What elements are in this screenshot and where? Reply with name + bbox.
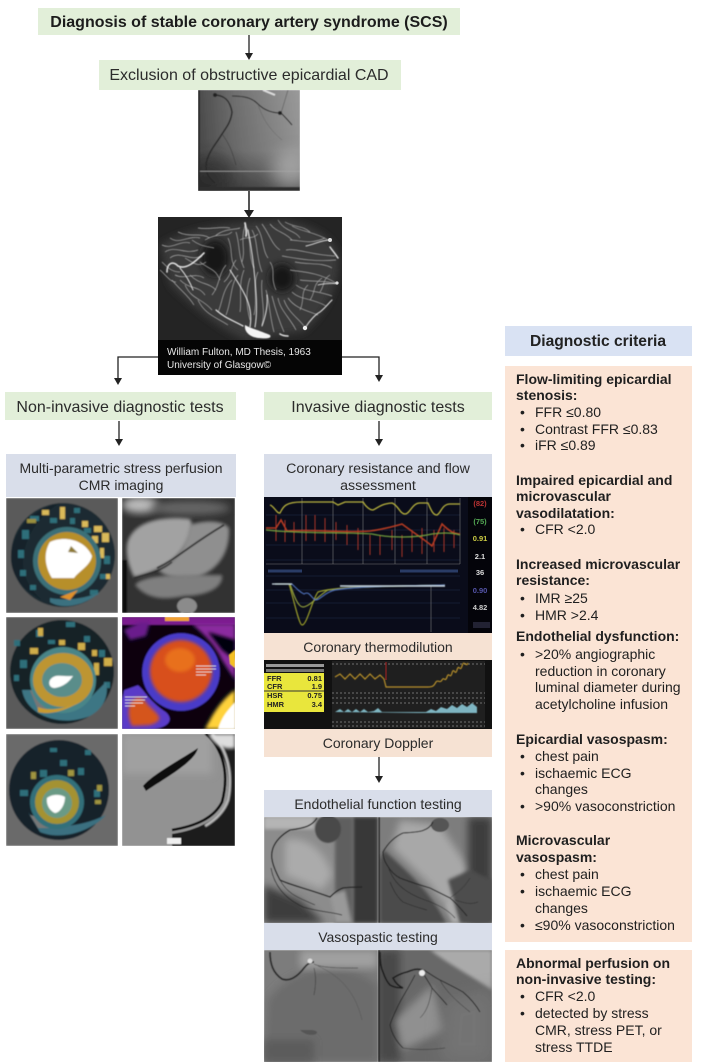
chart: FFR CFR HSR HMR readout with waveforms: 3.4 [312,700,323,709]
chart: FFR CFR HSR HMR readout with waveforms: FFR [267,674,282,683]
criterion: epicardial vasospasm: chest pain [535,748,599,764]
heading: diagnostic criteria [505,326,692,356]
readouts on right of chart: 0.91 [473,534,487,543]
criterion: microvascular vasospasm: vasospasm: [516,849,597,865]
criterion: microvascular vasospasm: • [520,866,525,882]
criterion: increased microvascular resistance: IMR ≥25 [535,590,588,606]
criterion: flow-limiting epicardial stenosis: Contrast FFR ≤0.83 [535,421,658,437]
criterion: microvascular vasospasm: chest pain [535,866,599,882]
band: coronary thermodilution: Coronary thermodilution [303,639,453,655]
heading: non-invasive diagnostic tests [5,392,236,420]
panel: abnormal perfusion on non-invasive testing: • [520,1005,525,1021]
criterion: flow-limiting epicardial stenosis: • [520,421,525,437]
caption bar: University of Glasgow© [167,360,272,371]
criterion: flow-limiting epicardial stenosis [516,371,672,453]
arrow: invasive to coronary resistance [375,421,383,446]
image: microvascular cast, William Fulton thesis [158,217,342,375]
image: stress perfusion PET colour map [122,617,235,729]
heading: coronary resistance [264,454,492,497]
heading: diagnostic criteria: Diagnostic criteria [530,333,666,350]
panel: vasospastic testing [264,923,492,1062]
image: perfusion map, middle [6,617,118,729]
panel: abnormal perfusion on non-invasive testing: detected by stress [535,1005,649,1021]
image: angiogram after nitrate [378,950,492,1062]
criterion: epicardial vasospasm [516,731,675,814]
heading: coronary resistance: assessment [340,478,416,494]
criterion: flow-limiting epicardial stenosis: Flow-limiting epicardial [516,371,672,387]
panel: abnormal perfusion on non-invasive testing [505,950,692,1062]
heading: vasospastic testing [264,923,492,950]
arrow: invasive flow tests to endothelial testing [375,757,383,783]
heading: endothelial function testing [264,790,492,817]
panel: endothelial function testing [264,790,492,923]
criterion: microvascular vasospasm: • [520,883,525,899]
criterion: increased microvascular resistance: Increased microvascular [516,556,681,572]
heading: invasive diagnostic tests [264,392,492,420]
chart: FFR CFR HSR HMR readout with waveforms: 0.81 [307,674,322,683]
criterion: endothelial dysfunction: luminal diameter during [535,679,681,695]
panel: abnormal perfusion on non-invasive testing: stress TTDE [535,1039,613,1055]
criterion: flow-limiting epicardial stenosis: FFR ≤0.80 [535,404,601,420]
heading: coronary resistance: Coronary resistance and flow [286,461,471,477]
criterion: impaired vasodilatation: Impaired epicardial and [516,472,672,488]
criterion: microvascular vasospasm: Microvascular [516,832,611,848]
criterion: epicardial vasospasm: ischaemic ECG [535,765,631,781]
title: diagnosis of SCS [38,8,460,35]
chart: FFR CFR HSR HMR readout with waveforms: 0.75 [307,691,322,700]
criterion: increased microvascular resistance [516,556,681,623]
image: late gadolinium enhancement CMR [122,734,235,846]
criterion: increased microvascular resistance: resistance: [516,572,590,588]
criterion: epicardial vasospasm: >90% vasoconstriction [535,798,675,814]
criterion: endothelial dysfunction: reduction in coronary [535,663,666,679]
criterion: endothelial dysfunction [516,628,681,712]
heading: CMR imaging: CMR imaging [79,477,163,493]
criterion: flow-limiting epicardial stenosis: • [520,437,525,453]
criterion: impaired vasodilatation: vasodilatation: [516,505,615,521]
readouts on right of chart: (75) [473,517,487,526]
criterion: impaired vasodilatation: • [520,521,525,537]
criterion: endothelial dysfunction: • [520,646,525,662]
panel: multi-parametric stress perfusion CMR [6,454,236,846]
chart: FFR CFR HSR HMR readout with waveforms [264,660,492,729]
criterion: microvascular vasospasm: ischaemic ECG [535,883,631,899]
arrow: angiogram to microvasculature [244,191,254,218]
heading: invasive diagnostic tests: Invasive diagnostic tests [291,399,465,416]
image: coronary angiogram during acetylcholine [378,817,492,923]
criterion: endothelial dysfunction: acetylcholine infusion [535,696,668,712]
criterion: microvascular vasospasm: • [520,917,525,933]
criterion: flow-limiting epicardial stenosis: stenosis: [516,387,577,403]
panel: diagnostic criteria list [505,366,692,942]
heading: exclusion of obstructive CAD: Exclusion of obstructive epicardial CAD [109,67,389,84]
heading: non-invasive diagnostic tests: Non-invasive diagnostic tests [16,399,224,416]
chart: FFR CFR HSR HMR readout with waveforms: CFR [267,682,283,691]
panel: abnormal perfusion on non-invasive testing: non-invasive testing: [516,971,656,987]
criterion: impaired vasodilatation: microvascular [516,488,611,504]
criterion: microvascular vasospasm: ≤90% vasoconstriction [535,917,675,933]
heading: CMR imaging [6,454,236,497]
readouts on right of chart [473,499,490,628]
title: diagnosis of SCS: Diagnosis of stable coronary artery syndrome (SCS) [50,14,448,31]
panel: abnormal perfusion on non-invasive testing: Abnormal perfusion on [516,955,670,971]
image: perfusion map, bottom [6,734,118,846]
readouts on right of chart: 2.1 [475,552,485,561]
image: four-chamber CMR cine [122,497,235,614]
criterion: epicardial vasospasm: changes [535,781,588,797]
heading: CMR imaging: Multi-parametric stress perfusion [19,460,223,476]
criterion: impaired vasodilatation: CFR <2.0 [535,521,596,537]
criterion: flow-limiting epicardial stenosis: iFR ≤0.89 [535,437,596,453]
criterion: epicardial vasospasm: • [520,748,525,764]
criterion: epicardial vasospasm: • [520,798,525,814]
criterion: endothelial dysfunction: Endothelial dysfunction: [516,628,679,644]
band: coronary Doppler [264,729,492,757]
caption bar: William Fulton, MD Thesis, 1963 [167,347,311,358]
readouts on right of chart: 36 [476,568,484,577]
criterion: increased microvascular resistance: HMR >2.4 [535,607,599,623]
chart: FFR CFR HSR HMR readout with waveforms: 1.9 [312,682,322,691]
criterion: impaired vasodilatation [516,472,672,537]
arrow: branch to invasive tests [342,357,383,382]
readouts on right of chart: 0.90 [473,586,487,595]
panel: coronary resistance and flow assessment [264,454,492,757]
criterion: increased microvascular resistance: • [520,607,525,623]
criterion: epicardial vasospasm: • [520,765,525,781]
criterion: microvascular vasospasm: changes [535,900,588,916]
band: coronary Doppler: Coronary Doppler [323,735,434,751]
heading: vasospastic testing: Vasospastic testing [318,929,438,945]
arrow: branch to non-invasive tests [114,357,158,385]
criterion: epicardial vasospasm: Epicardial vasospasm: [516,731,668,747]
heading: exclusion of obstructive CAD [99,60,401,90]
readouts on right of chart: 4.82 [473,603,487,612]
criterion: increased microvascular resistance: • [520,590,525,606]
criterion: endothelial dysfunction: >20% angiographic [535,646,655,662]
arrow: non-invasive to CMR [115,421,123,446]
panel: abnormal perfusion on non-invasive testing: • [520,988,525,1004]
arrow: title to exclusion [245,35,253,60]
criterion: microvascular vasospasm [516,832,675,933]
image: perfusion map, top [6,498,118,613]
panel: abnormal perfusion on non-invasive testing: CMR, stress PET, or [535,1022,662,1038]
chart: FFR CFR HSR HMR readout with waveforms: HMR [267,700,285,709]
chart: FFR CFR HSR HMR readout with waveforms: HSR [267,691,283,700]
panel: abnormal perfusion on non-invasive testing: CFR <2.0 [535,988,596,1004]
image: angiogram during spasm [264,950,378,1062]
chart: pressure and thermodilution traces [264,497,492,633]
caption bar [158,340,342,375]
band: coronary thermodilution [264,633,492,660]
readouts on right of chart: (82) [473,499,487,508]
heading: endothelial function testing: Endothelial function testing [294,796,462,812]
image: coronary angiogram [198,90,300,191]
criterion: flow-limiting epicardial stenosis: • [520,404,525,420]
image: coronary angiogram before acetylcholine [264,815,378,923]
